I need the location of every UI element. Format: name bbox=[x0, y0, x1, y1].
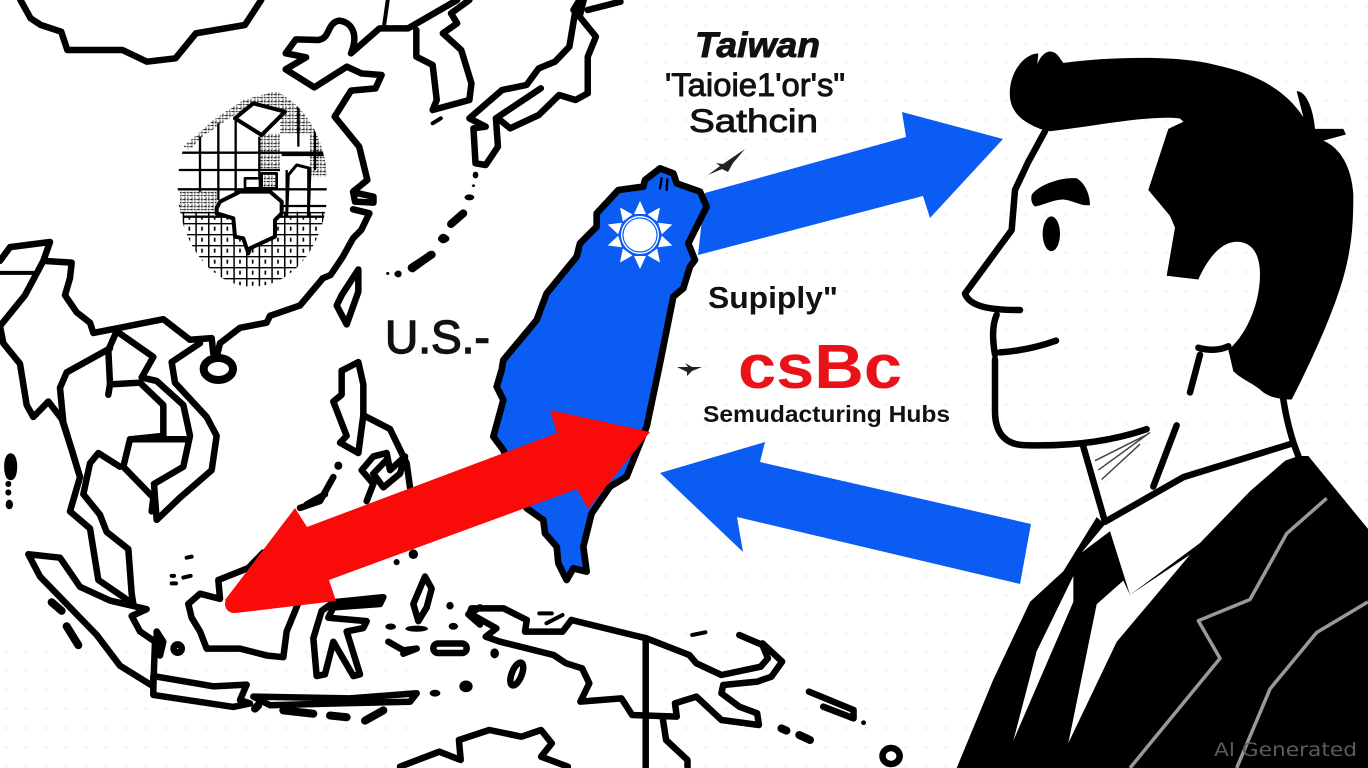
eyebrow bbox=[1031, 178, 1090, 207]
heading: Taiwan label: Sathcin bbox=[689, 103, 818, 139]
heading: Taiwan label bbox=[665, 26, 845, 139]
red double-headed arrow bbox=[225, 410, 650, 613]
icon: white sun emblem bbox=[606, 201, 674, 269]
icon: small jet near Taiwan north bbox=[708, 149, 745, 175]
Taiwan island filled blue bbox=[493, 168, 707, 580]
label: Supply: Supiply" bbox=[708, 280, 838, 315]
watermark: AI Generated: Al Generated bbox=[1214, 739, 1357, 761]
label: manufacturing hubs: Semudacturing Hubs bbox=[703, 401, 950, 427]
blue arrow: upper, Taiwan to figure bbox=[698, 112, 1003, 255]
figure: man in suit in profile bbox=[957, 51, 1368, 768]
red company logo: csBc bbox=[738, 333, 902, 402]
heading: Taiwan label: Taiwan bbox=[695, 26, 820, 65]
face lines bbox=[965, 131, 1298, 522]
icon: small jet east of Taiwan bbox=[677, 363, 702, 376]
blue arrow: lower, figure to Taiwan bbox=[660, 442, 1031, 584]
city grid inset map of China bbox=[178, 92, 328, 286]
lapel lines bbox=[1130, 498, 1368, 768]
hair bbox=[1010, 51, 1353, 399]
grid outline: walled districts bbox=[217, 103, 310, 253]
map: North and East Asia coastline bbox=[20, 0, 620, 278]
jacket bbox=[957, 456, 1368, 768]
chin shading bbox=[1095, 432, 1150, 479]
map: New Guinea and northern Australia bbox=[400, 608, 900, 767]
shirt and collar bbox=[1082, 454, 1293, 595]
label: U.S.-: U.S.- bbox=[385, 311, 490, 363]
heading: Taiwan label: 'Taioie1'or's" bbox=[665, 67, 845, 103]
eye bbox=[1043, 216, 1060, 251]
map: Southeast Asia bbox=[0, 234, 480, 721]
